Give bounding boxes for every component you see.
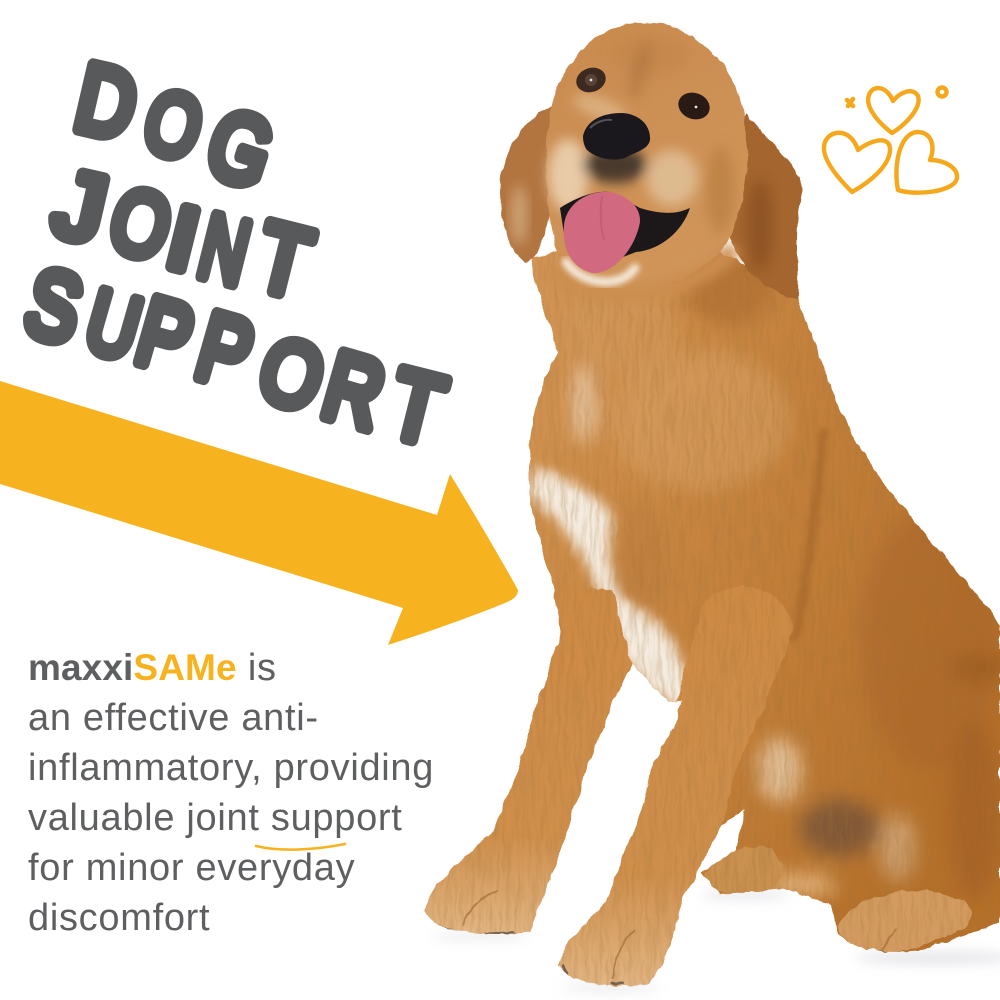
title: I	[158, 188, 208, 290]
title: T	[247, 201, 321, 318]
mouth	[560, 192, 690, 262]
title: S	[16, 248, 92, 365]
text block: maxxiSAMe description: for minor everyday	[28, 847, 355, 889]
chest white	[530, 466, 691, 712]
nose highlight	[590, 120, 612, 128]
title: G	[195, 89, 285, 209]
left ear light	[511, 185, 527, 245]
left front leg	[425, 585, 632, 934]
dog photo	[420, 22, 1000, 1000]
chest and belly shading	[560, 245, 1000, 900]
text block: maxxiSAMe description: maxxiSAMe is	[28, 647, 277, 689]
tongue groove	[601, 196, 604, 240]
title: P	[186, 293, 264, 409]
title: U	[76, 270, 151, 379]
nails	[446, 928, 886, 983]
text block: maxxiSAMe description: inflammatory, providing	[28, 747, 434, 789]
text block: maxxiSAMe description: discomfort	[28, 897, 210, 939]
title	[16, 43, 454, 465]
right front leg	[559, 585, 792, 986]
left ear	[500, 105, 555, 262]
text block: maxxiSAMe description: an effective anti-	[28, 697, 319, 739]
neck blend	[552, 248, 735, 294]
title: O	[99, 168, 182, 281]
left eye	[573, 64, 609, 96]
underline: joint support	[256, 844, 345, 850]
title: N	[190, 194, 259, 305]
title: R	[313, 332, 395, 450]
title: O	[134, 70, 213, 180]
right ear	[727, 112, 803, 300]
text block: maxxiSAMe description	[28, 647, 434, 939]
dog body	[420, 240, 1000, 1000]
title: P	[126, 278, 204, 394]
right ear shadow	[747, 180, 773, 270]
title: D	[67, 43, 146, 161]
title: T	[380, 348, 454, 465]
rear paw far	[702, 847, 782, 894]
chin	[566, 262, 635, 282]
title: O	[248, 317, 336, 432]
fur streaks	[420, 240, 1000, 1000]
text block: maxxiSAMe description: valuable joint support	[28, 797, 403, 839]
title: J	[45, 151, 115, 264]
floor shadow	[430, 891, 1000, 991]
muzzle	[548, 35, 734, 234]
nose	[583, 113, 650, 160]
dog head	[546, 22, 747, 294]
tongue	[564, 192, 640, 273]
shoulder	[795, 430, 824, 640]
paw details	[462, 890, 896, 978]
rear paw near	[838, 891, 971, 953]
icon: hearts	[824, 88, 957, 193]
right eye	[675, 88, 713, 124]
arrow	[0, 381, 518, 645]
